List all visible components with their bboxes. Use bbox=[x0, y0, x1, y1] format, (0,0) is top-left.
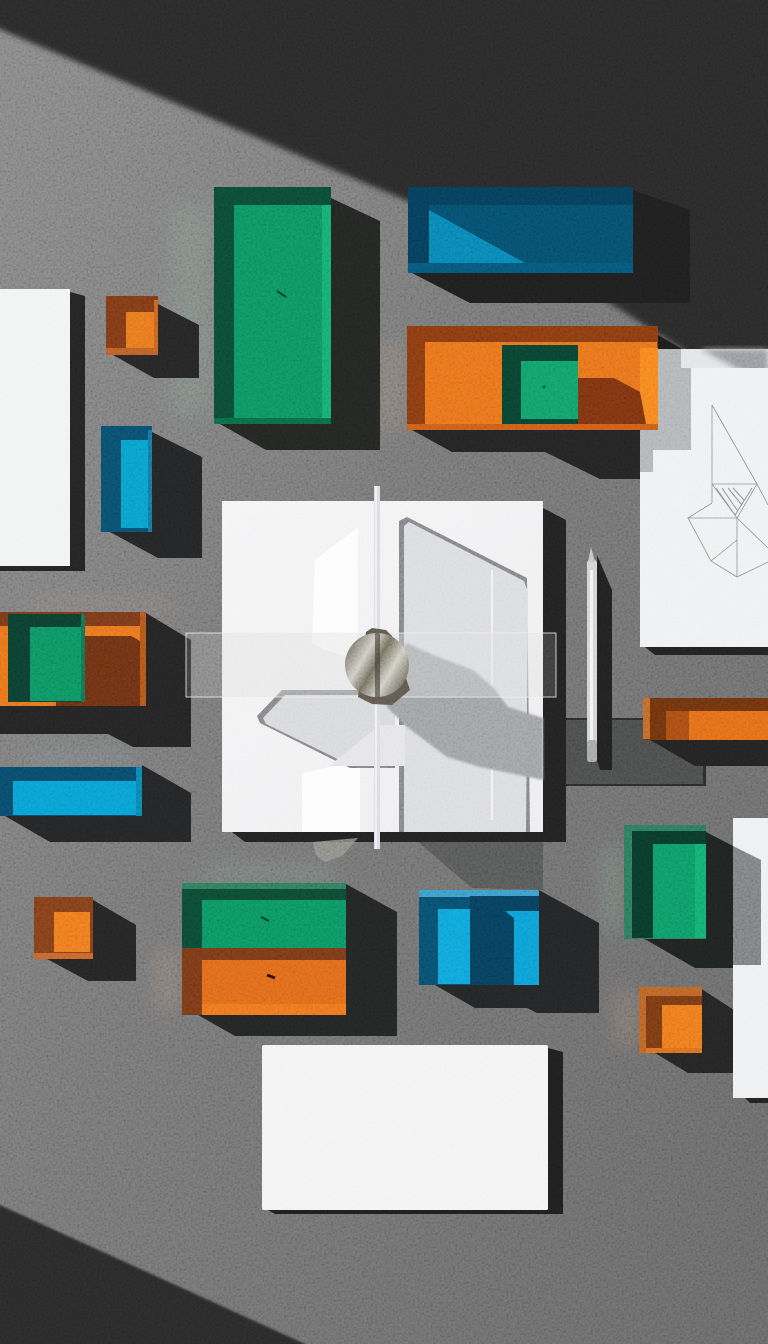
colored light reflections bbox=[30, 205, 637, 1045]
hub: centre seam bbox=[375, 633, 380, 697]
shadow bbox=[268, 1048, 563, 1214]
light patches bbox=[312, 527, 358, 660]
below centre reflection bbox=[313, 838, 358, 862]
pencil construction sketch bbox=[688, 405, 768, 577]
inset green block bbox=[502, 345, 578, 424]
centre paper bbox=[222, 501, 543, 832]
vertical acrylic bar bbox=[374, 486, 380, 849]
shadow bbox=[220, 198, 380, 450]
shadow behind right corner bbox=[658, 335, 682, 349]
block: right small orange bbox=[639, 987, 734, 1073]
hub: bracket bbox=[358, 628, 410, 705]
inset green block bbox=[8, 614, 85, 702]
diagonal shade on back sheet bbox=[700, 349, 768, 385]
shadow bbox=[47, 900, 136, 981]
shadow bbox=[597, 555, 612, 770]
green part bbox=[182, 883, 346, 949]
shadow bbox=[412, 190, 690, 303]
sheet: bottom white paper bbox=[262, 1045, 563, 1214]
hub: steel disc bbox=[345, 633, 409, 697]
pen bbox=[587, 547, 612, 770]
block: left orange with green inset bbox=[0, 612, 191, 747]
shadow bbox=[655, 988, 734, 1073]
bottom-left shadow bbox=[0, 1196, 305, 1344]
back sheet bbox=[658, 349, 768, 369]
glass shadow right of centre bbox=[565, 718, 706, 786]
edge shadow below paper bbox=[645, 647, 768, 655]
cast shadow on paper bbox=[640, 349, 691, 472]
block: large green bbox=[214, 187, 380, 450]
block: wide orange with green inset bbox=[407, 326, 682, 479]
block: small orange lower-left bbox=[34, 897, 136, 981]
shadow bbox=[650, 740, 768, 766]
acrylic panel: lower left bbox=[257, 690, 405, 768]
shadow bbox=[0, 292, 85, 571]
shadow bbox=[745, 1098, 768, 1103]
block: right green bbox=[624, 825, 733, 968]
block: twin blue bbox=[419, 890, 599, 1013]
inset shadow bbox=[578, 378, 646, 424]
shadow bbox=[5, 765, 191, 842]
shadow bbox=[0, 613, 191, 747]
shadow bbox=[198, 884, 397, 1036]
paper shadow bbox=[232, 508, 566, 842]
orange part bbox=[182, 948, 346, 1015]
block: left blue bbox=[0, 765, 191, 842]
acrylic panel: upper right bbox=[399, 517, 530, 832]
block: small orange top-left bbox=[106, 296, 199, 378]
centre assembly bbox=[186, 486, 566, 849]
block: small blue bbox=[101, 426, 202, 558]
shadow bbox=[113, 304, 199, 378]
sheet: right lower paper bbox=[733, 818, 768, 1103]
block: top blue bbox=[408, 187, 690, 303]
disc shadow bbox=[385, 643, 543, 780]
shadow bbox=[412, 430, 640, 479]
sheet: right drawing paper bbox=[640, 349, 768, 655]
shadow bbox=[435, 890, 599, 1013]
sheet: left white paper bbox=[0, 289, 85, 571]
shadow bbox=[643, 832, 733, 968]
top shadow band bbox=[0, 0, 768, 410]
horizontal acrylic bar bbox=[186, 633, 556, 697]
glass shadow below centre bbox=[418, 842, 543, 890]
block: stacked green and orange bbox=[182, 883, 397, 1036]
block: right orange bbox=[643, 698, 768, 766]
shadow bbox=[108, 432, 202, 558]
